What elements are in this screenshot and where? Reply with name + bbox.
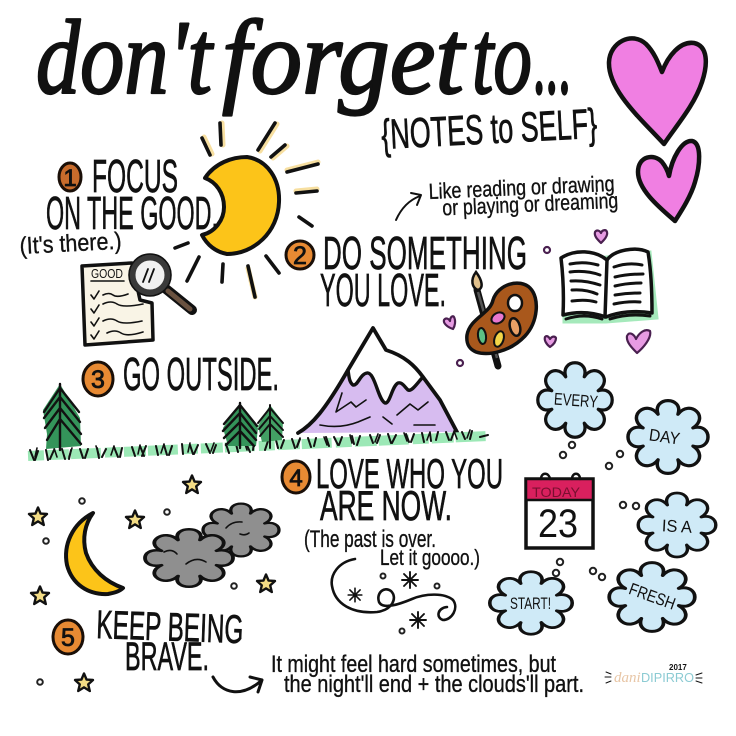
icon: calendar: TODAY [532, 484, 581, 500]
cloud: every: EVERY [553, 390, 599, 412]
cloud: day: DAY [648, 425, 681, 449]
icon: good list with magnifier [82, 254, 192, 345]
icon: calendar: 23 [538, 502, 578, 546]
icon: tree middle [223, 403, 258, 448]
note: like reading or drawing: or playing or dreaming [442, 188, 619, 220]
icon: grass strip [28, 430, 488, 460]
cloud: start [490, 572, 572, 634]
cloud: fresh: FRESH [626, 579, 678, 614]
icon: mountain [298, 328, 457, 433]
text: ... [534, 0, 572, 116]
icon: calendar [526, 474, 593, 548]
icon: swirl with snowflakes [332, 559, 455, 634]
note: the past is over [304, 526, 480, 570]
cloud: every [538, 363, 612, 437]
heading: 1 focus on the good [46, 150, 218, 239]
heading: 5 keep being brave [53, 603, 244, 679]
note: like reading or drawing [428, 171, 619, 221]
note: like reading or drawing: Like reading or drawing [428, 171, 615, 204]
heading: 5 keep being brave: BRAVE. [125, 635, 209, 679]
icon: large pink heart [609, 38, 706, 144]
note: the past is over: Let it goooo.) [380, 545, 480, 570]
cloud: is a: IS A [661, 516, 693, 537]
note: the past is over: (The past is over. [304, 526, 436, 553]
logo: dani dipirro 2017: DIPIRRO [641, 670, 694, 685]
logo: dani dipirro 2017 [605, 663, 702, 686]
note: it's there: (It's there.) [19, 228, 122, 260]
icon: tree left [43, 384, 81, 450]
heading: 3 go outside: GO OUTSIDE. [123, 348, 279, 400]
icon: sun [175, 123, 318, 297]
title: don't [36, 0, 214, 116]
heading: 4 love who you are now: 4 [289, 465, 303, 492]
arrow: to hobby note [396, 193, 421, 220]
heading: 2 do something you love [286, 227, 527, 316]
icon: small purple hearts and dots [444, 230, 650, 366]
note: it might feel hard sometimes: the night'll end + the clouds'll part. [284, 671, 584, 698]
heading: 1 focus on the good: ON THE GOOD. [46, 187, 218, 239]
icon: open book [561, 249, 657, 322]
heading: 1 focus on the good: 1 [63, 165, 77, 192]
heading: 5 keep being brave: 5 [61, 624, 75, 652]
note: it might feel hard sometimes: It might feel hard sometimes, but [271, 651, 556, 678]
cloud: start: START! [510, 594, 551, 613]
title [36, 0, 572, 116]
arrow: to closing note [213, 677, 262, 692]
cloud: fresh [609, 563, 695, 631]
thought bubble dots [553, 442, 639, 580]
heading: 4 love who you are now [282, 450, 503, 529]
heading: 2 do something you love: DO SOMETHING [323, 227, 527, 279]
logo: dani dipirro 2017: dani [614, 670, 641, 686]
heading: 2 do something you love: YOU LOVE. [320, 264, 446, 316]
heading: 3 go outside: 3 [91, 366, 105, 394]
icon: crescent moon [66, 513, 123, 594]
title: forget [222, 0, 466, 116]
heading: 4 love who you are now: ARE NOW. [320, 482, 452, 529]
heading: 3 go outside [83, 348, 279, 400]
cloud: is a [638, 493, 716, 557]
icon: stars and dots [29, 476, 275, 691]
heading: 5 keep being brave: KEEP BEING [96, 603, 244, 652]
icon: grey clouds [145, 504, 279, 587]
subtitle: notes to self: {NOTES to SELF} [380, 100, 598, 158]
icon: tree right [258, 405, 283, 448]
heading: 4 love who you are now: LOVE WHO YOU [316, 450, 503, 497]
logo: dani dipirro 2017: 2017 [669, 663, 687, 672]
icon: small pink heart [638, 141, 699, 221]
icon: paint palette and brush [467, 272, 536, 366]
heading: 2 do something you love: 2 [293, 242, 307, 270]
title: to [472, 0, 532, 116]
note: it might feel hard sometimes [271, 651, 584, 698]
heading: 1 focus on the good: FOCUS [92, 150, 178, 202]
cloud: day [628, 401, 708, 473]
icon: good list with magnifier: GOOD [91, 266, 123, 281]
